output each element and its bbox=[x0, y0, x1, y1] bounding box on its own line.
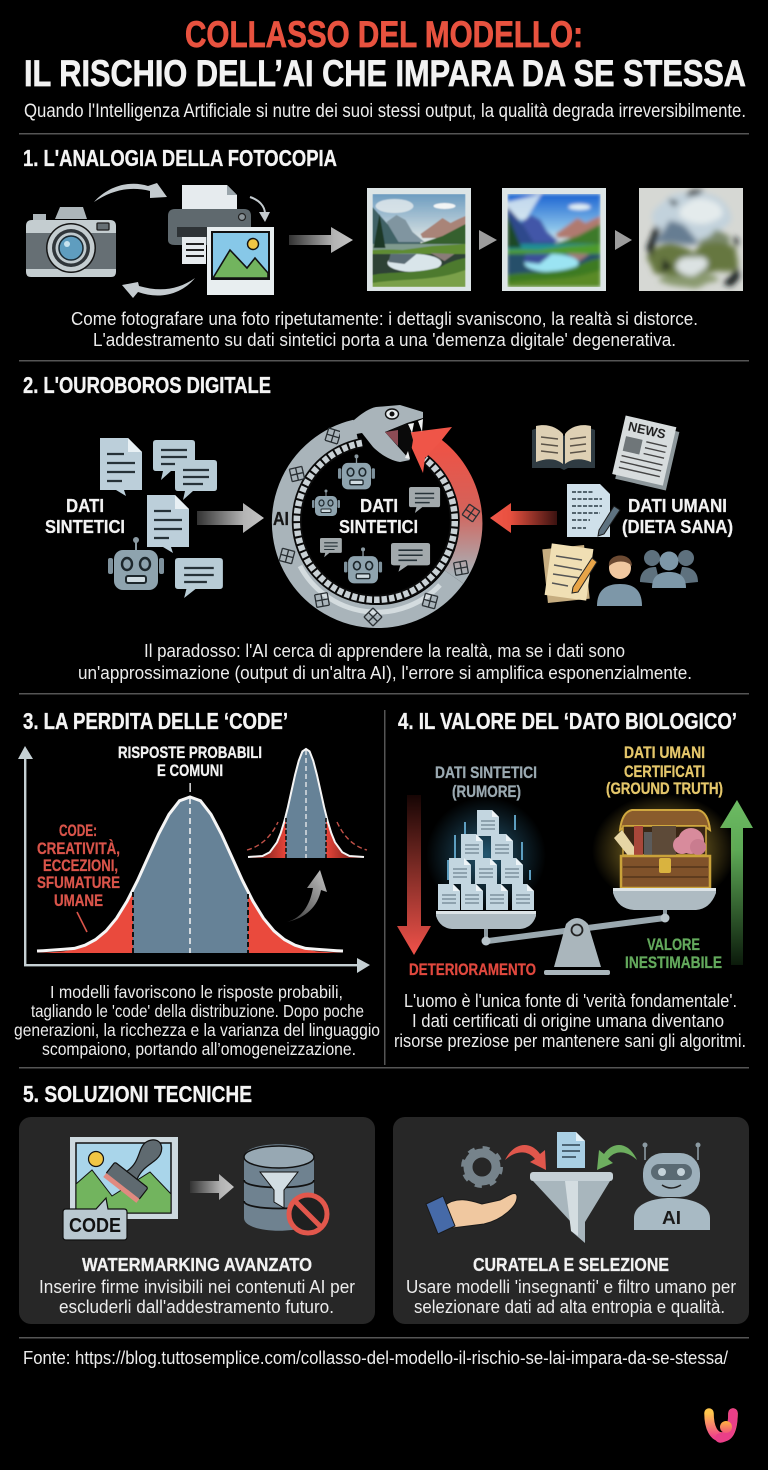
label: deterioration: DETERIORAMENTO bbox=[409, 960, 536, 979]
caption 4: L'uomo è l'unica fonte di 'verità fondamentale'. bbox=[404, 991, 737, 1011]
icon: hand bbox=[426, 1193, 517, 1234]
label: tails: CREATIVITÀ, bbox=[37, 839, 120, 858]
text: curation: selezionare dati ad alta entropia e qualità. bbox=[414, 1296, 725, 1317]
label: dati sintetici left bbox=[45, 496, 125, 537]
icon: funnel bbox=[530, 1172, 613, 1243]
caption 3: I modelli favoriscono le risposte probabili, bbox=[50, 982, 343, 1002]
caption 4 bbox=[394, 991, 746, 1051]
arrow: print back to camera bbox=[122, 278, 195, 298]
icon: newspaper: NEWS bbox=[627, 419, 667, 442]
title: COLLASSO DEL MODELLO: bbox=[185, 14, 583, 55]
red arrow head bbox=[405, 427, 452, 473]
tag: code: CODE bbox=[69, 1215, 121, 1237]
arrow: to database bbox=[190, 1174, 234, 1200]
label: tails bbox=[37, 821, 120, 932]
label: certified human data: DATI UMANI bbox=[624, 743, 705, 762]
caption 3: tagliando le 'code' della distribuzione. Dopo poche bbox=[31, 1001, 364, 1021]
text: curation: CURATELA E SELEZIONE bbox=[473, 1255, 669, 1275]
icon: book bbox=[532, 425, 595, 470]
label: inestimable value: VALORE bbox=[647, 935, 700, 954]
balance scale bbox=[436, 888, 716, 975]
label: dati umani: (DIETA SANA) bbox=[622, 517, 733, 537]
heading 1: 1. L'ANALOGIA DELLA FOTOCOPIA bbox=[23, 145, 337, 171]
label: tails: ECCEZIONI, bbox=[43, 856, 118, 875]
caption 3: scompaiono, portando all’omogeneizzazione. bbox=[42, 1039, 356, 1059]
icon: people group bbox=[640, 550, 698, 588]
icon: document over funnel bbox=[557, 1132, 585, 1168]
label: certified human data: CERTIFICATI bbox=[624, 762, 705, 781]
label: dati sintetici left: SINTETICI bbox=[45, 517, 125, 537]
caption 2: un'approssimazione (output di un'altra AI), l'errore si amplifica esponenzialmente. bbox=[78, 662, 692, 683]
icon: prohibited sign bbox=[289, 1195, 327, 1233]
label: dati umani bbox=[622, 496, 733, 537]
bell curve bbox=[37, 797, 343, 953]
label: certified human data bbox=[606, 743, 723, 798]
icon: AI robot: AI bbox=[662, 1208, 681, 1228]
label: AI on ring: AI bbox=[273, 509, 289, 529]
label: common answers: E COMUNI bbox=[157, 761, 223, 780]
icon: database with funnel bbox=[244, 1144, 314, 1231]
caption 2 bbox=[78, 640, 692, 683]
label: synthetic noise: DATI SINTETICI bbox=[435, 763, 537, 782]
caption 3 bbox=[14, 982, 380, 1059]
label: common answers bbox=[118, 743, 262, 792]
logo bbox=[709, 1413, 733, 1438]
text: watermarking: Inserire firme invisibili nei contenuti AI per bbox=[39, 1276, 355, 1297]
caption 1 bbox=[71, 308, 698, 350]
label: inestimable value: INESTIMABILE bbox=[625, 953, 722, 972]
text: watermarking: escluderli dall'addestramento futuro. bbox=[59, 1296, 334, 1317]
panel: section 2 digital ouroboros bbox=[23, 372, 733, 683]
panel: curation bbox=[393, 1117, 749, 1324]
tag: code bbox=[63, 1198, 127, 1240]
label: dati sintetici centre bbox=[339, 496, 418, 537]
arrow: degrade 1 bbox=[479, 230, 497, 250]
title bbox=[24, 14, 746, 94]
icons inside ring bbox=[312, 454, 440, 583]
icon: handwritten document with pen bbox=[567, 484, 620, 537]
photo: blurred bbox=[502, 188, 606, 291]
treasure chest with glow bbox=[592, 794, 736, 906]
arrow: to photo sequence bbox=[289, 227, 353, 253]
synthetic data icons left bbox=[100, 438, 223, 598]
caption 1: L'addestramento su dati sintetici porta a una 'demenza digitale' degenerativa. bbox=[93, 329, 676, 350]
chart axes bbox=[18, 746, 370, 973]
ouroboros snake ring bbox=[275, 405, 481, 626]
snake head bbox=[340, 405, 423, 462]
panel: section 4 biological data value bbox=[394, 708, 753, 1051]
label: tails: UMANE bbox=[54, 891, 103, 910]
arrow: red to funnel bbox=[505, 1145, 546, 1170]
icon: printed picture bbox=[207, 227, 274, 295]
caption 3: generazioni, la ricchezza e la varianza del linguaggio bbox=[14, 1020, 380, 1040]
heading 2: 2. L'OUROBOROS DIGITALE bbox=[23, 372, 271, 398]
arrow: deterioration bbox=[397, 795, 431, 955]
arrow: curve narrowing bbox=[287, 870, 327, 922]
icon: camera bbox=[26, 207, 116, 277]
icon: AI robot bbox=[634, 1142, 710, 1230]
arrow: degrade 2 bbox=[615, 230, 632, 250]
label: synthetic noise bbox=[435, 763, 537, 801]
heading 5: 5. SOLUZIONI TECNICHE bbox=[23, 1081, 252, 1107]
arrow: value up bbox=[720, 800, 753, 965]
label: dati sintetici centre: SINTETICI bbox=[339, 517, 418, 537]
icon: stamped image bbox=[70, 1128, 178, 1219]
caption 1: Come fotografare una foto ripetutamente: i dettagli svaniscono, la realtà si distorce. bbox=[71, 308, 698, 329]
label: synthetic noise: (RUMORE) bbox=[452, 782, 521, 801]
label: tails: SFUMATURE bbox=[37, 873, 120, 892]
label: certified human data: (GROUND TRUTH) bbox=[606, 779, 723, 798]
arrow: synthetic input bbox=[197, 503, 264, 533]
arrow: human input bbox=[490, 503, 557, 533]
panel: section 1 photocopy analogy bbox=[23, 145, 743, 350]
text: watermarking bbox=[39, 1255, 355, 1317]
arrow: camera to printer bbox=[94, 183, 167, 202]
text: curation: Usare modelli 'insegnanti' e filtro umano per bbox=[406, 1276, 736, 1297]
label: dati sintetici centre: DATI bbox=[360, 496, 398, 516]
caption 2: Il paradosso: l'AI cerca di apprendere la realtà, ma se i dati sono bbox=[144, 640, 625, 661]
document pile with glow bbox=[426, 797, 546, 913]
icon: printer bbox=[168, 185, 270, 264]
text: watermarking: WATERMARKING AVANZATO bbox=[82, 1255, 312, 1275]
label: dati umani: DATI UMANI bbox=[628, 496, 727, 516]
text: curation bbox=[406, 1255, 736, 1317]
label: tails: CODE: bbox=[59, 821, 97, 840]
icon: gear bbox=[463, 1148, 501, 1186]
scales band bbox=[297, 443, 455, 600]
icon: notes and pencil bbox=[542, 543, 597, 603]
panel: section 3 loss of tails bbox=[14, 708, 380, 1059]
label: inestimable value bbox=[625, 935, 722, 972]
arrow: green to funnel bbox=[597, 1145, 637, 1170]
icon: person bbox=[597, 555, 642, 606]
label: common answers: RISPOSTE PROBABILI bbox=[118, 743, 262, 762]
photo: sharp bbox=[367, 188, 471, 291]
photo: distorted bbox=[639, 188, 743, 291]
heading 3: 3. LA PERDITA DELLE ‘CODE’ bbox=[23, 708, 288, 734]
label: dati sintetici left: DATI bbox=[66, 496, 104, 516]
panel: watermarking bbox=[19, 1117, 375, 1324]
icon: newspaper bbox=[611, 415, 680, 490]
inset narrowed curve bbox=[247, 749, 367, 858]
caption 4: I dati certificati di origine umana diventano bbox=[412, 1011, 724, 1031]
